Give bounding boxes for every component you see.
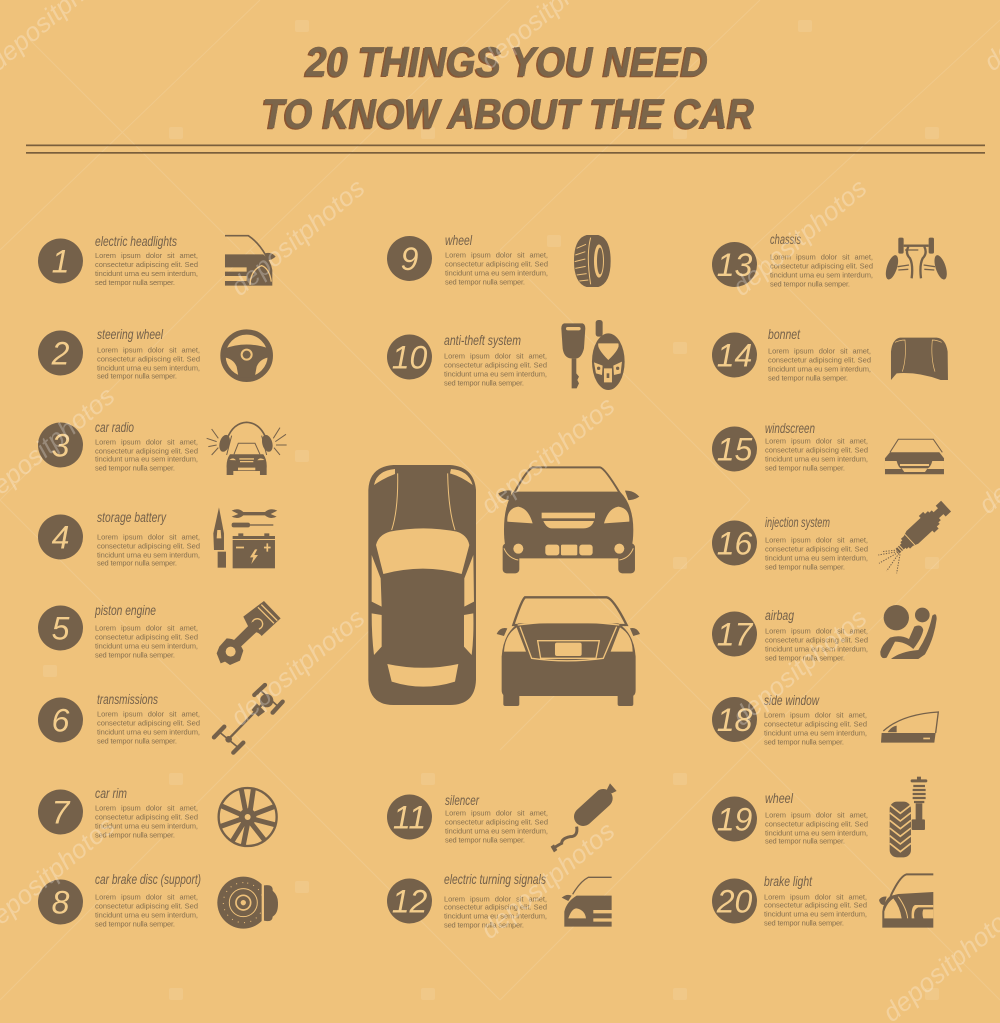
number badge 6 [38,698,83,742]
description 16: sed tempor nulla semper. [765,562,845,572]
icon: tyre [574,235,611,287]
number badge 7 [38,790,83,834]
description 11: sed tempor nulla semper. [445,836,525,844]
number badge 11 [387,794,432,840]
description 16: tincidunt urna eu sem interdum, [765,554,868,562]
description 5: tincidunt urna eu sem interdum, [95,642,198,650]
heading: wheel: wheel [445,233,473,248]
description 8: sed tempor nulla semper. [95,920,175,928]
description 18 [764,710,867,746]
description 2 [97,346,200,380]
description 18: Lorem ipsum dolor sit amet, [764,710,867,720]
description 4: consectetur adipiscing elit. Sed [97,542,200,550]
item 1: electric headlights [38,234,276,287]
number badge 14: 14 [717,338,752,374]
description 15: Lorem ipsum dolor sit amet, [765,436,868,446]
description 10 [444,352,547,388]
number badge 8 [38,880,83,924]
description 20: tincidunt urna eu sem interdum, [764,910,867,918]
description 8: Lorem ipsum dolor sit amet, [95,892,198,902]
description 12 [444,894,547,930]
description 16: Lorem ipsum dolor sit amet, [765,536,868,544]
description 1: consectetur adipiscing elit. Sed [95,260,198,269]
heading: car radio: car radio [95,420,134,435]
description 17 [765,626,868,662]
title: TO KNOW ABOUT THE CAR [260,91,753,138]
number badge 12 [387,878,432,924]
number badge 19 [712,796,757,842]
number badge 7: 7 [52,794,71,830]
description 4: tincidunt urna eu sem interdum, [97,550,200,560]
heading: electric headlights: electric headlights [95,234,177,249]
description 13 [770,252,873,288]
heading: chassis: chassis [770,232,801,247]
description 10: consectetur adipiscing elit. Sed [444,360,547,370]
description 3: tincidunt urna eu sem interdum, [95,454,198,464]
number badge 4: 4 [52,520,69,556]
description 20: consectetur adipiscing elit. Sed [764,900,867,910]
description 3: consectetur adipiscing elit. Sed [95,446,198,456]
description 3: sed tempor nulla semper. [95,464,175,472]
description 11: consectetur adipiscing elit. Sed [445,818,548,826]
number badge 18: 18 [717,702,752,738]
description 11: tincidunt urna eu sem interdum, [445,826,548,836]
watermarks: depositphotos [225,603,370,732]
heading: steering wheel: steering wheel [97,327,164,342]
heading: injection system: injection system [765,515,830,530]
heading: bonnet: bonnet [768,327,801,342]
description 11: Lorem ipsum dolor sit amet, [445,808,548,818]
item 20: brake light [712,874,933,928]
item 18: side window [712,693,938,746]
icon: car front with turn signal [562,877,612,927]
heading: airbag: airbag [765,608,794,623]
car top view [368,465,476,705]
description 6 [97,710,200,746]
title: 20 THINGS YOU NEED [304,39,706,86]
heading: car brake disc (support): car brake disc (support) [95,872,201,887]
icon: battery, clamp and tools [213,507,277,568]
description 17: tincidunt urna eu sem interdum, [765,644,868,654]
icon: car rear with brake light [879,874,933,928]
description 2: sed tempor nulla semper. [97,372,177,380]
number badge 13: 13 [717,247,752,283]
title: TO KNOW ABOUT THE CAR [262,90,755,137]
heading: wheel: wheel [765,791,794,806]
title [260,38,755,138]
description 3 [95,438,198,472]
description 14: tincidunt urna eu sem interdum, [768,364,871,374]
number badge 16: 16 [717,526,752,562]
item 15: windscreen [712,421,944,474]
icon: car key and alarm remote [561,320,625,390]
watermarks: depositphotos [727,173,872,302]
number badge 5: 5 [52,610,70,646]
watermarks: depositphotos [727,603,872,732]
description 19: sed tempor nulla semper. [765,836,845,846]
heading: windscreen: windscreen [765,421,815,436]
description 13: Lorem ipsum dolor sit amet, [770,252,873,262]
description 6: consectetur adipiscing elit. Sed [97,718,200,728]
number badge 20: 20 [716,884,752,920]
number badge 10: 10 [392,340,428,376]
number badge 9 [387,236,432,281]
number badge 10 [387,334,432,380]
icon: alloy rim [219,788,277,846]
heading: piston engine: piston engine [94,603,156,618]
description 1: sed tempor nulla semper. [95,278,175,287]
item 19: wheel [712,777,927,857]
description 9 [445,250,548,286]
description 16 [765,536,868,572]
icon: car door with side window [881,712,938,743]
number badge 5 [38,606,83,650]
icon: exhaust silencer [551,783,617,852]
number badge 17: 17 [717,616,754,652]
description 7 [95,804,198,840]
description 5: sed tempor nulla semper. [95,650,175,660]
description 5: consectetur adipiscing elit. Sed [95,632,198,642]
description 4: sed tempor nulla semper. [97,558,177,568]
description 14: sed tempor nulla semper. [768,374,848,382]
icon: bonnet [891,338,948,380]
icon: piston and connecting rod [217,601,281,665]
description 15: tincidunt urna eu sem interdum, [765,454,868,464]
description 1 [95,251,198,287]
item 4: storage battery [38,507,277,568]
number badge 19: 19 [717,802,752,838]
centre illustration: car top, front and rear views [368,465,640,706]
description 20: sed tempor nulla semper. [764,918,844,928]
item 2: steering wheel [38,327,271,380]
description 6: Lorem ipsum dolor sit amet, [97,710,200,718]
description 2: tincidunt urna eu sem interdum, [97,364,200,372]
number badge 6: 6 [52,702,70,738]
title: 20 THINGS YOU NEED [305,38,708,85]
description 4 [97,532,200,568]
number badge 16 [712,520,757,566]
item 14: bonnet [712,327,948,382]
item 5: piston engine [38,601,281,665]
description 19 [765,810,868,846]
description 10: Lorem ipsum dolor sit amet, [444,352,547,360]
heading: anti-theft system: anti-theft system [444,333,521,348]
icon: steering wheel [223,332,271,379]
description 14 [768,346,871,382]
heading: storage battery: storage battery [97,510,167,525]
description 20 [764,892,867,928]
description 3: Lorem ipsum dolor sit amet, [95,438,198,446]
number badge 3: 3 [52,428,70,464]
item 10: anti-theft system [387,320,625,390]
watermarks: depositphotos [475,816,620,945]
icon: car front with windscreen [885,439,944,474]
description 18: tincidunt urna eu sem interdum, [764,728,867,738]
icon: fuel injector with spray [878,498,954,573]
description 9: Lorem ipsum dolor sit amet, [445,250,548,260]
item 7: car rim [38,786,277,846]
description 12: tincidunt urna eu sem interdum, [444,912,547,920]
number badge 4 [38,514,83,560]
description 1: Lorem ipsum dolor sit amet, [95,251,198,260]
description 8 [95,892,198,928]
description 7: sed tempor nulla semper. [95,830,175,840]
number badge 17 [712,612,757,656]
description 12: consectetur adipiscing elit. Sed [444,902,547,912]
item 12: electric turning signals [387,872,612,930]
description 6: sed tempor nulla semper. [97,736,177,746]
car rear view [497,597,640,706]
description 19: Lorem ipsum dolor sit amet, [765,810,868,820]
description 19: consectetur adipiscing elit. Sed [765,820,868,828]
number badge 9: 9 [401,241,419,277]
watermarks: depositphotos [225,173,370,302]
number badge 2 [38,330,83,376]
item 11: silencer [387,783,617,852]
item 17: airbag [712,605,937,662]
description 19: tincidunt urna eu sem interdum, [765,828,868,838]
description 8: consectetur adipiscing elit. Sed [95,902,198,910]
description 17: sed tempor nulla semper. [765,654,845,662]
description 16: consectetur adipiscing elit. Sed [765,544,868,554]
heading: side window: side window [764,693,820,708]
description 17: Lorem ipsum dolor sit amet, [765,626,868,636]
description 11 [445,808,548,844]
description 13: consectetur adipiscing elit. Sed [770,262,873,270]
number badge 18 [712,697,757,742]
description 9: sed tempor nulla semper. [445,278,525,286]
item 13: chassis [712,232,949,288]
description 7: tincidunt urna eu sem interdum, [95,822,198,830]
item 6: transmissions [38,685,283,753]
heading: car rim: car rim [95,786,127,801]
description 4: Lorem ipsum dolor sit amet, [97,532,200,542]
icon: tyre with suspension strut [890,777,927,857]
icon: brake disc and caliper [217,877,278,929]
description 5: Lorem ipsum dolor sit amet, [95,624,198,632]
description 10: sed tempor nulla semper. [444,378,524,388]
icon: drivetrain [214,685,283,753]
number badge 3 [38,422,83,468]
description 15: sed tempor nulla semper. [765,464,845,472]
item 3: car radio [38,420,287,475]
number badge 15: 15 [717,432,752,468]
description 7: Lorem ipsum dolor sit amet, [95,804,198,812]
description 15: consectetur adipiscing elit. Sed [765,446,868,454]
description 8: tincidunt urna eu sem interdum, [95,910,198,920]
description 12: sed tempor nulla semper. [444,920,524,930]
number badge 12: 12 [392,884,428,920]
description 6: tincidunt urna eu sem interdum, [97,728,200,736]
number badge 8: 8 [52,884,70,920]
description 14: consectetur adipiscing elit. Sed [768,356,871,364]
description 15 [765,436,868,472]
description 9: consectetur adipiscing elit. Sed [445,260,548,268]
description 2: Lorem ipsum dolor sit amet, [97,346,200,354]
description 7: consectetur adipiscing elit. Sed [95,812,198,822]
icon: car with headphones [207,422,287,475]
number badge 15 [712,426,757,472]
description 5 [95,624,198,660]
item 8: car brake disc (support) [38,872,278,929]
number badge 14 [712,332,757,378]
heading: transmissions: transmissions [97,692,158,707]
description 20: Lorem ipsum dolor sit amet, [764,892,867,902]
heading: brake light: brake light [764,874,813,889]
number badge 1: 1 [52,244,69,280]
number badge 13 [712,242,757,287]
icon: chassis [883,238,949,281]
item 16: injection system [712,498,954,573]
icon: airbag and seated passenger [880,605,937,659]
number badge 20 [712,878,757,924]
description 10: tincidunt urna eu sem interdum, [444,370,547,378]
icon: car front with headlight [225,236,276,286]
item 9: wheel [387,233,611,287]
heading: silencer: silencer [445,793,479,808]
description 18: consectetur adipiscing elit. Sed [764,720,867,728]
description 9: tincidunt urna eu sem interdum, [445,268,548,278]
number badge 11: 11 [393,800,426,836]
description 13: sed tempor nulla semper. [770,280,850,288]
description 13: tincidunt urna eu sem interdum, [770,270,873,280]
description 2: consectetur adipiscing elit. Sed [97,354,200,364]
description 17: consectetur adipiscing elit. Sed [765,636,868,644]
heading: electric turning signals: electric turning signals [444,872,546,887]
description 12: Lorem ipsum dolor sit amet, [444,894,547,904]
description 18: sed tempor nulla semper. [764,738,844,746]
car front view [498,467,639,573]
description 1: tincidunt urna eu sem interdum, [95,269,198,278]
number badge 2: 2 [51,336,70,372]
description 14: Lorem ipsum dolor sit amet, [768,346,871,356]
watermarks: depositphotos [475,391,620,520]
number badge 1 [38,238,83,284]
